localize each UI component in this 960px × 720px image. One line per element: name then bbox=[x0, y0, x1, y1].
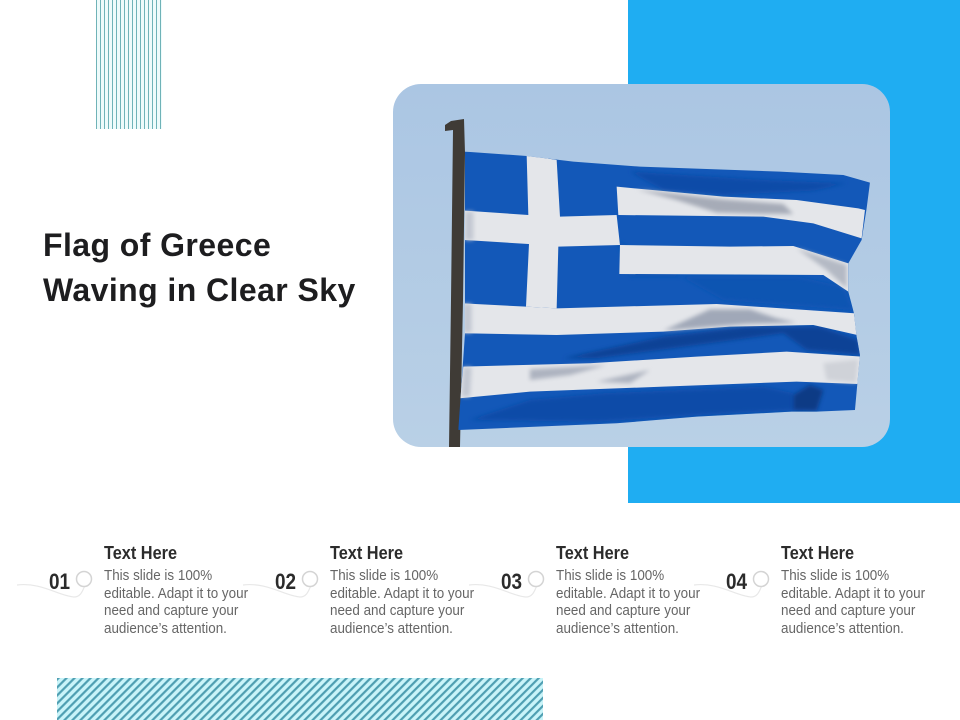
body 01: This slide is 100% bbox=[104, 567, 212, 584]
white stripes bbox=[617, 187, 865, 238]
step 04 bbox=[694, 543, 925, 637]
body 01: need and capture your bbox=[104, 602, 238, 619]
flag bbox=[450, 143, 877, 437]
body 04: editable. Adapt it to your bbox=[781, 585, 925, 602]
body 02: audience’s attention. bbox=[330, 620, 453, 637]
fold shadows on white stripes bbox=[462, 189, 858, 397]
number 04: 04 bbox=[726, 569, 747, 594]
blue background panel bbox=[628, 0, 960, 503]
title: Waving in Clear Sky bbox=[43, 272, 356, 308]
title: Flag of Greece bbox=[43, 227, 271, 263]
body 01: audience’s attention. bbox=[104, 620, 227, 637]
heading 04: Text Here bbox=[781, 543, 854, 563]
number 01: 01 bbox=[49, 569, 70, 594]
body 03: need and capture your bbox=[556, 602, 690, 619]
swirl 03 bbox=[469, 570, 544, 598]
body 04 bbox=[781, 567, 925, 637]
body 04: need and capture your bbox=[781, 602, 915, 619]
body 03: audience’s attention. bbox=[556, 620, 679, 637]
body 01: editable. Adapt it to your bbox=[104, 585, 248, 602]
step 02 bbox=[243, 543, 474, 637]
step 01 bbox=[17, 543, 248, 637]
heading 02: Text Here bbox=[330, 543, 403, 563]
flag pole bbox=[445, 119, 465, 447]
body 03: editable. Adapt it to your bbox=[556, 585, 700, 602]
body 03: This slide is 100% bbox=[556, 567, 664, 584]
title bbox=[43, 227, 356, 308]
sky bbox=[393, 84, 890, 447]
body 02 bbox=[330, 567, 474, 637]
dark crease bottom right bbox=[793, 385, 823, 411]
decorative diagonal hatch band bbox=[57, 678, 543, 720]
heading 01: Text Here bbox=[104, 543, 177, 563]
body 03 bbox=[556, 567, 700, 637]
body 01 bbox=[104, 567, 248, 637]
body 02: This slide is 100% bbox=[330, 567, 438, 584]
photo: Greek flag on a pole against clear sky bbox=[393, 84, 890, 447]
swirl 04 bbox=[694, 570, 770, 598]
swirl 01 bbox=[17, 570, 92, 598]
decorative vertical line pattern bbox=[96, 0, 162, 129]
swirl 02 bbox=[243, 570, 318, 598]
body 02: need and capture your bbox=[330, 602, 464, 619]
body 02: editable. Adapt it to your bbox=[330, 585, 474, 602]
body 04: This slide is 100% bbox=[781, 567, 889, 584]
number 02: 02 bbox=[275, 569, 296, 594]
body 04: audience’s attention. bbox=[781, 620, 904, 637]
heading 03: Text Here bbox=[556, 543, 629, 563]
dark blue fold shading bbox=[470, 172, 860, 422]
step 03 bbox=[469, 543, 700, 637]
number 03: 03 bbox=[501, 569, 522, 594]
